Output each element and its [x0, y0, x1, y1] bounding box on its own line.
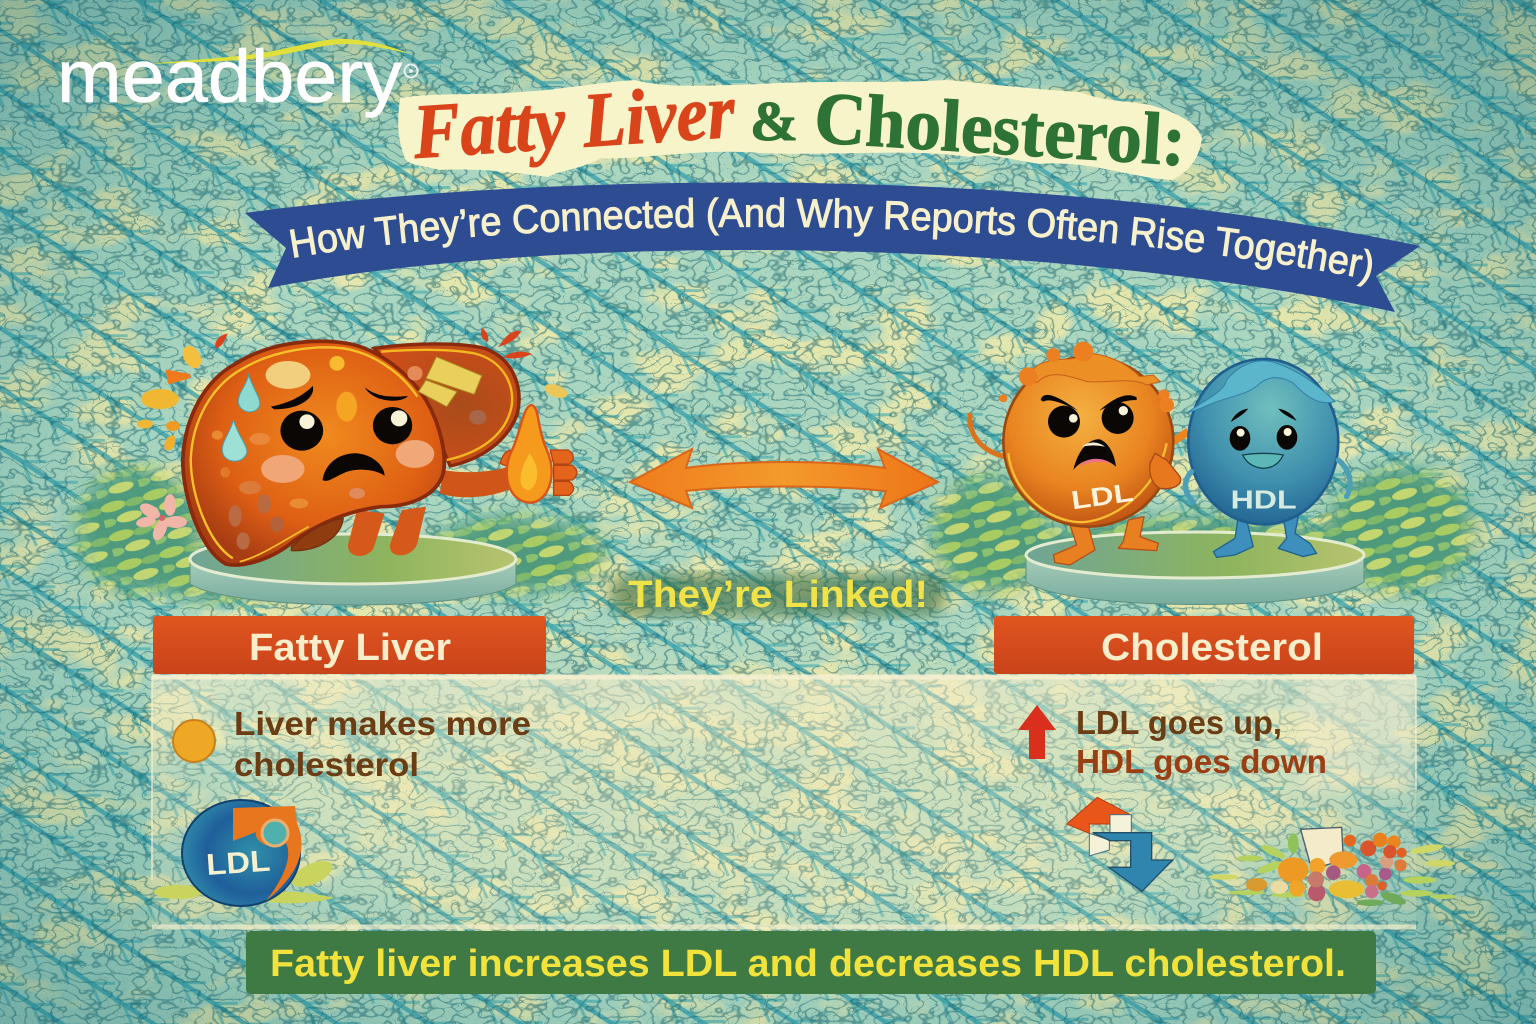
liver right lobe	[374, 344, 519, 466]
heading: Fatty Liver: Fatty Liver	[249, 627, 451, 669]
icon: healthy food pile	[1208, 827, 1457, 907]
title: Fatty Liver & Cholesterol: Fatty Liver	[409, 67, 738, 175]
subtitle ribbon	[245, 182, 1420, 312]
title: Fatty Liver & Cholesterol: Cholesterol:	[812, 77, 1188, 182]
liver fat patches	[212, 356, 486, 550]
title: Fatty Liver & Cholesterol	[398, 67, 1202, 182]
icon: up and down arrows	[1067, 797, 1173, 891]
text: liver makes more cholesterol: Liver makes more	[234, 705, 531, 742]
text: LDL goes up, HDL goes down	[1076, 704, 1327, 780]
gall drop	[507, 405, 552, 503]
text: liver makes more cholesterol: cholesterol	[234, 746, 419, 783]
liver legs	[348, 507, 426, 556]
icon: LDL badge	[154, 800, 336, 906]
linked label: They’re Linked!	[628, 574, 928, 616]
droplets around liver	[137, 328, 569, 452]
flower	[135, 494, 187, 543]
LDL label: LDL	[1069, 477, 1135, 515]
liver face	[271, 386, 313, 409]
LDL hand	[1150, 453, 1181, 489]
heading: Fatty Liver	[153, 616, 546, 674]
characters: LDL and HDL	[970, 342, 1350, 565]
connecting double arrow	[630, 449, 938, 508]
heading: Cholesterol	[994, 616, 1414, 674]
LDL character	[970, 342, 1188, 565]
bottom summary banner: Fatty liver increases LDL and decreases HDL cholesterol.	[270, 943, 1346, 985]
icon: cholesterol droplet	[173, 720, 215, 762]
text: LDL goes up, HDL goes down: HDL goes down	[1076, 743, 1327, 780]
HDL face	[1231, 409, 1297, 422]
icon: LDL badge: LDL	[205, 845, 271, 882]
panel: details	[152, 676, 1416, 926]
liver arm and thumb	[440, 467, 516, 497]
HDL label: HDL	[1231, 484, 1297, 514]
character: fatty liver	[183, 341, 577, 565]
HDL character	[1186, 359, 1350, 557]
icon: red up arrow	[1018, 705, 1056, 759]
text: liver makes more cholesterol	[234, 705, 531, 783]
heading: Cholesterol: Cholesterol	[1101, 627, 1323, 669]
liver butter patch	[418, 357, 482, 407]
liver main lobe	[183, 341, 444, 565]
pedestal: right	[1026, 532, 1364, 604]
logo: meadbery: meadbery	[57, 35, 402, 118]
title: Fatty Liver & Cholesterol: &	[750, 91, 798, 153]
bushes behind left pedestal	[60, 450, 620, 610]
pedestal: left	[190, 534, 516, 605]
bottom summary banner	[152, 927, 1416, 994]
text: LDL goes up, HDL goes down: LDL goes up,	[1076, 704, 1282, 741]
liver sweat drops	[238, 375, 260, 412]
bushes behind right pedestal	[920, 450, 1490, 610]
subtitle ribbon: How They’re Connected (And Why Reports Often Rise Together)	[290, 197, 1372, 287]
LDL face	[1041, 395, 1078, 411]
